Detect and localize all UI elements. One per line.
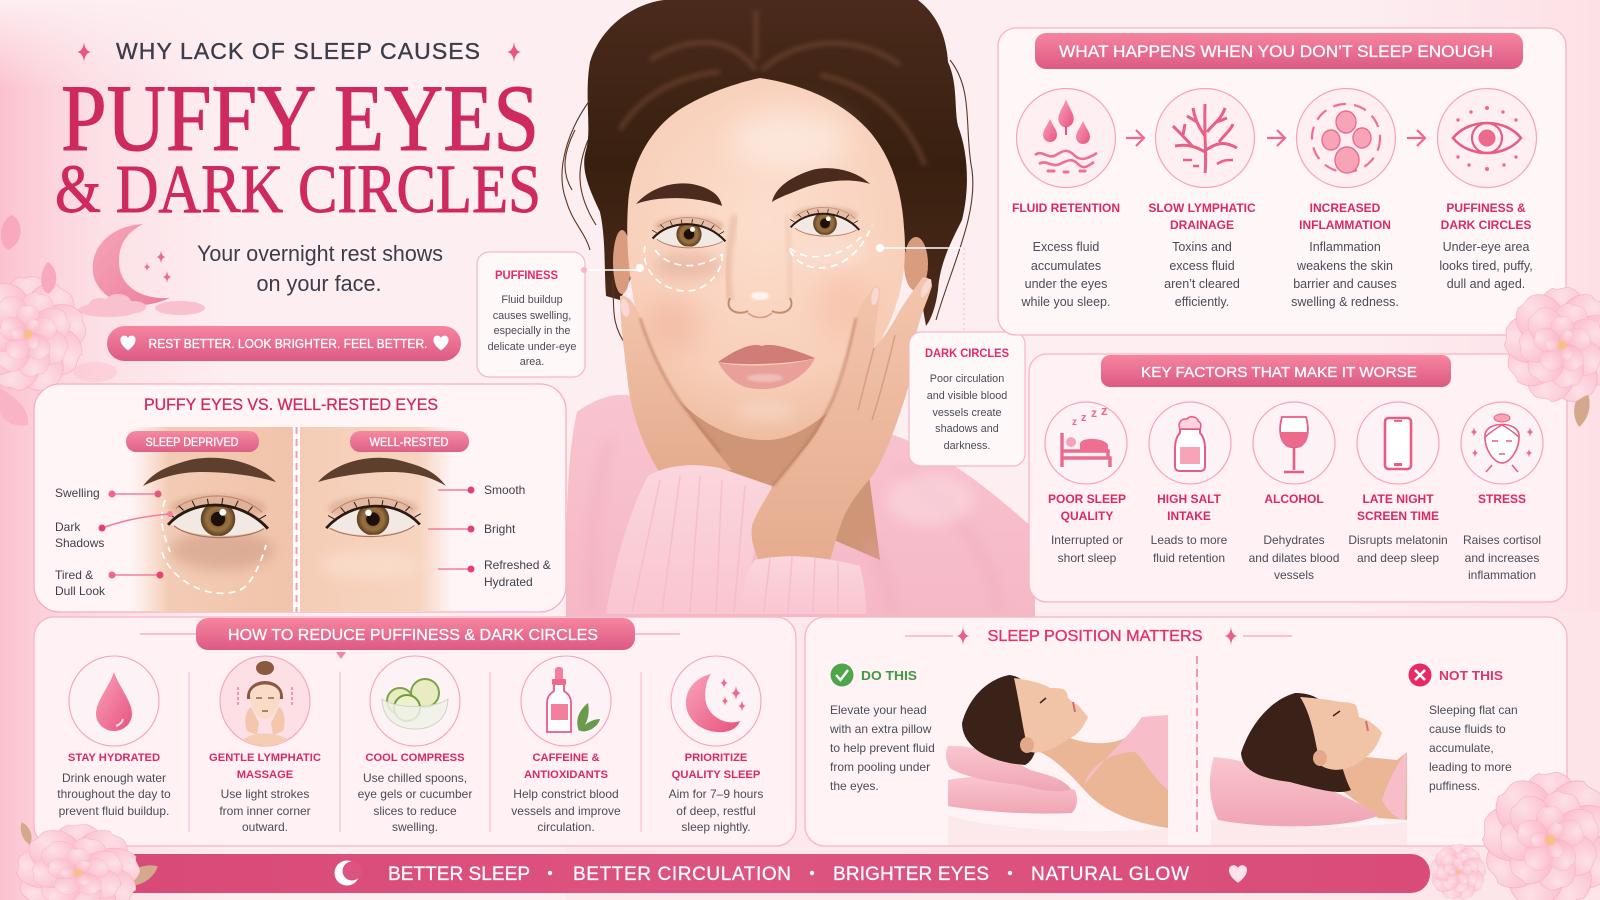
step 4 text: PUFFINESS &	[1446, 201, 1526, 215]
callout labels right: Hydrated	[484, 575, 533, 589]
panel: sleep position matters	[805, 617, 1567, 846]
arrow	[1267, 130, 1285, 146]
callout: puffiness: delicate under-eye	[488, 341, 576, 353]
callout labels left: Shadows	[55, 536, 104, 550]
tip 1 text: Drink enough water	[62, 771, 166, 785]
callout: puffiness: especially in the	[494, 325, 570, 337]
callout labels right	[428, 483, 551, 589]
panel header: WHAT HAPPENS WHEN YOU DON’T SLEEP ENOUGH	[1059, 42, 1493, 61]
badge: well-rested	[350, 431, 469, 452]
panel header: KEY FACTORS THAT MAKE IT WORSE	[1141, 364, 1417, 381]
peony flowers: right middle	[1500, 286, 1600, 428]
bottom banner	[100, 854, 1430, 893]
factor 4 text: Disrupts melatonin	[1348, 533, 1448, 547]
step 4 text	[1439, 201, 1533, 291]
eyebrows	[636, 168, 870, 206]
panel: how to reduce puffiness	[34, 617, 796, 846]
step 3 text: barrier and causes	[1293, 277, 1397, 291]
neck	[640, 400, 892, 580]
icon: salt bottle	[1149, 402, 1231, 484]
panel: puffy vs well-rested comparison	[34, 384, 566, 612]
tip 1 text: throughout the day to	[57, 787, 171, 801]
callout: puffiness: Fluid buildup	[501, 294, 563, 306]
factor 3 text: vessels	[1274, 568, 1314, 582]
tip 1 text: prevent fluid buildup.	[59, 804, 169, 818]
step 3 text: INCREASED	[1310, 201, 1381, 215]
step 1 text: FLUID RETENTION	[1012, 201, 1120, 215]
tip 5 text: QUALITY SLEEP	[672, 769, 761, 781]
peony flowers: left middle	[0, 215, 117, 426]
tip 4 text: ANTIOXIDANTS	[524, 769, 608, 781]
left hand	[619, 296, 732, 476]
tip 3 text: slices to reduce	[373, 804, 457, 818]
factor 5 text: STRESS	[1478, 492, 1526, 506]
bottom banner: BETTER SLEEP	[388, 864, 530, 885]
hair	[562, 0, 973, 345]
step 1 text: Excess fluid	[1033, 240, 1099, 254]
step 2 text: Toxins and	[1172, 240, 1232, 254]
factor 5 text: inflammation	[1468, 568, 1536, 582]
factor 4 text: LATE NIGHT	[1362, 492, 1434, 506]
sparkle right	[507, 42, 521, 62]
callout: dark circles: shadows and	[935, 423, 999, 435]
factor 4 text: SCREEN TIME	[1357, 509, 1439, 523]
icon: fluid retention	[1016, 88, 1116, 188]
panel heading	[905, 627, 1292, 645]
portrait of woman with hands on cheeks	[562, 0, 1035, 617]
do this text: to help prevent fluid	[830, 741, 935, 755]
callout: dark circles: darkness.	[944, 440, 990, 452]
step 4 text: dull and aged.	[1447, 277, 1525, 291]
tagline second line: on your face.	[256, 271, 382, 296]
do this text: the eyes.	[830, 779, 879, 793]
icon: stressed face	[1461, 402, 1543, 484]
badge: sleep deprived	[126, 431, 259, 452]
step 2 text: efficiently.	[1175, 295, 1229, 309]
callout: dark circles: Poor circulation	[930, 373, 1004, 385]
second title line: & DARK CIRCLES	[55, 151, 541, 227]
step 4 text: DARK CIRCLES	[1441, 218, 1531, 232]
icon: poor sleep bed: z	[1091, 406, 1097, 420]
step 3 text	[1291, 201, 1399, 309]
do this label: DO THIS	[861, 668, 917, 683]
factor 2 text: fluid retention	[1153, 551, 1225, 565]
tip 2 text	[209, 752, 321, 834]
arrow	[1407, 130, 1425, 146]
callout labels left: Dark	[55, 520, 81, 534]
factor 5 text	[1463, 492, 1541, 582]
tip 2 text: GENTLE LYMPHATIC	[209, 752, 321, 764]
step 1 text: under the eyes	[1025, 277, 1107, 291]
tip 5 text	[669, 752, 763, 834]
not this text	[1429, 703, 1518, 793]
tagline: Your overnight rest shows	[197, 241, 443, 266]
tip 4 text	[511, 752, 621, 834]
not this label	[1408, 664, 1503, 686]
pink sweater	[566, 395, 1035, 617]
icon: wine glass	[1253, 402, 1335, 484]
tip 3 text: COOL COMPRESS	[365, 752, 465, 764]
bottom banner: BRIGHTER EYES	[833, 864, 989, 885]
do this text	[829, 703, 935, 793]
main title: PUFFY EYES	[61, 65, 539, 171]
factor 3 text: ALCOHOL	[1264, 492, 1324, 506]
callout: dark circles: DARK CIRCLES	[925, 348, 1009, 360]
step 2 text: aren’t cleared	[1164, 277, 1240, 291]
right hand	[752, 277, 934, 572]
panel header	[1035, 33, 1523, 69]
tip 4 text: CAFFEINE &	[532, 752, 600, 764]
factor 5 text: and increases	[1465, 551, 1539, 565]
factor 1 text: POOR SLEEP	[1048, 492, 1126, 506]
icon: water drop	[69, 656, 159, 746]
factor 1 text: short sleep	[1058, 551, 1117, 565]
callout labels left: Swelling	[55, 486, 100, 500]
tip 4 text: vessels and improve	[511, 804, 621, 818]
factor 1 text: QUALITY	[1061, 509, 1113, 523]
step 1 text: while you sleep.	[1021, 295, 1110, 309]
step 3 text: weakens the skin	[1296, 259, 1393, 273]
tip 2 text: Use light strokes	[221, 787, 309, 801]
factor 3 text: Dehydrates	[1263, 533, 1325, 547]
icon: heart	[1229, 865, 1247, 883]
sparkle left	[77, 42, 91, 62]
step 4 text: Under-eye area	[1443, 240, 1529, 254]
tip 4 text: Help constrict blood	[513, 787, 619, 801]
step 1 text	[1012, 201, 1120, 309]
do this text: with an extra pillow	[829, 722, 932, 736]
tip 1 text: STAY HYDRATED	[68, 752, 160, 764]
callout: puffiness	[477, 252, 644, 377]
callout: dark circles: and visible blood	[927, 390, 1007, 402]
icon: inflammation cells	[1296, 88, 1396, 188]
icon: serum bottle with leaf	[521, 656, 611, 746]
icon: lymphatic massage woman	[220, 656, 310, 747]
peony flowers: bottom right	[1428, 771, 1600, 900]
nose	[729, 298, 791, 318]
slogan pill: REST BETTER. LOOK BRIGHTER. FEEL BETTER.	[148, 336, 428, 351]
do this text: from pooling under	[830, 760, 930, 774]
photo: sleep deprived eye	[130, 427, 293, 612]
tip 3 text: swelling.	[392, 820, 438, 834]
icon: lymphatic tree	[1156, 88, 1254, 188]
callout labels right: Refreshed &	[484, 558, 551, 572]
factor 1 text	[1048, 492, 1126, 565]
icon: poor sleep bed: z	[1072, 417, 1077, 428]
peony flowers: bottom left	[12, 821, 161, 900]
factor 2 text	[1151, 492, 1228, 565]
panel header	[140, 618, 680, 659]
bottom banner: NATURAL GLOW	[1031, 864, 1189, 885]
tip 3 text: eye gels or cucumber	[358, 787, 472, 801]
icon: poor sleep bed	[1045, 402, 1127, 484]
callout: puffiness: PUFFINESS	[495, 270, 558, 282]
factor 3 text: and dilates blood	[1249, 551, 1339, 565]
tip 4 text: circulation.	[537, 820, 595, 834]
icon: poor sleep bed: z	[1101, 403, 1108, 418]
under-eye dashed crescents	[644, 225, 872, 291]
panel header: HOW TO REDUCE PUFFINESS & DARK CIRCLES	[228, 627, 598, 644]
panel: key factors	[1029, 354, 1567, 602]
icon: cucumber bowl	[370, 656, 460, 746]
tip 5 text: PRIORITIZE	[685, 752, 748, 764]
tip 2 text: from inner corner	[219, 804, 311, 818]
tip 2 text: outward.	[242, 820, 288, 834]
callout labels right: Smooth	[484, 483, 525, 497]
panel: what happens when you don't sleep enough	[998, 28, 1566, 335]
lips	[718, 345, 815, 389]
photo: well-rested eye	[300, 427, 453, 612]
icon: eye	[1438, 88, 1536, 188]
callout: puffiness: causes swelling,	[493, 310, 571, 322]
tip 3 text	[358, 752, 472, 834]
icon: moon	[334, 860, 362, 886]
do this text: Elevate your head	[830, 703, 927, 717]
tip 5 text: of deep, restful	[676, 804, 756, 818]
ears	[613, 230, 928, 294]
tip 2 text: MASSAGE	[237, 769, 294, 781]
not this text: Sleeping flat can	[1429, 703, 1518, 717]
callout: dark circles: vessels create	[932, 407, 1002, 419]
tip 1 text	[57, 752, 171, 818]
callout labels left: Tired &	[55, 568, 93, 582]
face	[627, 78, 905, 440]
factor 5 text: Raises cortisol	[1463, 533, 1541, 547]
tip 3 text: Use chilled spoons,	[363, 771, 467, 785]
badge: well-rested: WELL-RESTED	[370, 437, 448, 449]
step 1 text: accumulates	[1031, 259, 1101, 273]
icon: smartphone	[1357, 402, 1439, 484]
eyes	[652, 216, 725, 248]
callout: dark circles	[876, 244, 1025, 466]
not this text: leading to more	[1429, 760, 1512, 774]
comparison heading: PUFFY EYES VS. WELL-RESTED EYES	[144, 396, 438, 414]
factor 4 text	[1348, 492, 1448, 565]
icon: crescent moon with clouds	[78, 224, 205, 317]
tip 5 text: sleep nightly.	[681, 820, 751, 834]
factor 2 text: INTAKE	[1167, 509, 1211, 523]
bottom banner: BETTER CIRCULATION	[573, 864, 791, 885]
illustration: flat sleeper	[1210, 693, 1407, 845]
step 3 text: INFLAMMATION	[1299, 218, 1391, 232]
factor 2 text: Leads to more	[1151, 533, 1228, 547]
panel header	[1101, 355, 1451, 387]
not this text: accumulate,	[1429, 741, 1494, 755]
panel heading: SLEEP POSITION MATTERS	[988, 628, 1202, 645]
arrow	[1126, 130, 1144, 146]
tip 5 text: Aim for 7–9 hours	[669, 787, 763, 801]
step 2 text: SLOW LYMPHATIC	[1148, 201, 1256, 215]
slogan pill	[107, 326, 461, 361]
left sweater cuff	[606, 465, 772, 614]
do this label	[830, 664, 917, 686]
not this text: puffiness.	[1429, 779, 1480, 793]
eyebrow heading: WHY LACK OF SLEEP CAUSES	[116, 38, 480, 64]
factor 3 text	[1249, 492, 1339, 582]
step 3 text: swelling & redness.	[1291, 295, 1399, 309]
badge: sleep deprived: SLEEP DEPRIVED	[146, 437, 238, 449]
right sweater cuff	[743, 556, 866, 614]
step 4 text: looks tired, puffy,	[1439, 259, 1533, 273]
factor 4 text: and deep sleep	[1357, 551, 1439, 565]
not this text: cause fluids to	[1429, 722, 1506, 736]
step 2 text	[1148, 201, 1256, 309]
icon: poor sleep bed: z	[1081, 412, 1087, 424]
factor 2 text: HIGH SALT	[1157, 492, 1222, 506]
icon: moon and stars	[671, 656, 761, 746]
factor 1 text: Interrupted or	[1051, 533, 1123, 547]
illustration: elevated head sleeper	[946, 675, 1168, 845]
callout labels left	[55, 486, 173, 598]
callout: puffiness: area.	[520, 356, 544, 368]
step 3 text: Inflammation	[1309, 240, 1381, 254]
title block	[55, 38, 541, 227]
callout labels left: Dull Look	[55, 584, 106, 598]
not this label: NOT THIS	[1439, 668, 1503, 683]
callout labels right: Bright	[484, 522, 516, 536]
step 2 text: excess fluid	[1169, 259, 1235, 273]
step 2 text: DRAINAGE	[1170, 218, 1234, 232]
